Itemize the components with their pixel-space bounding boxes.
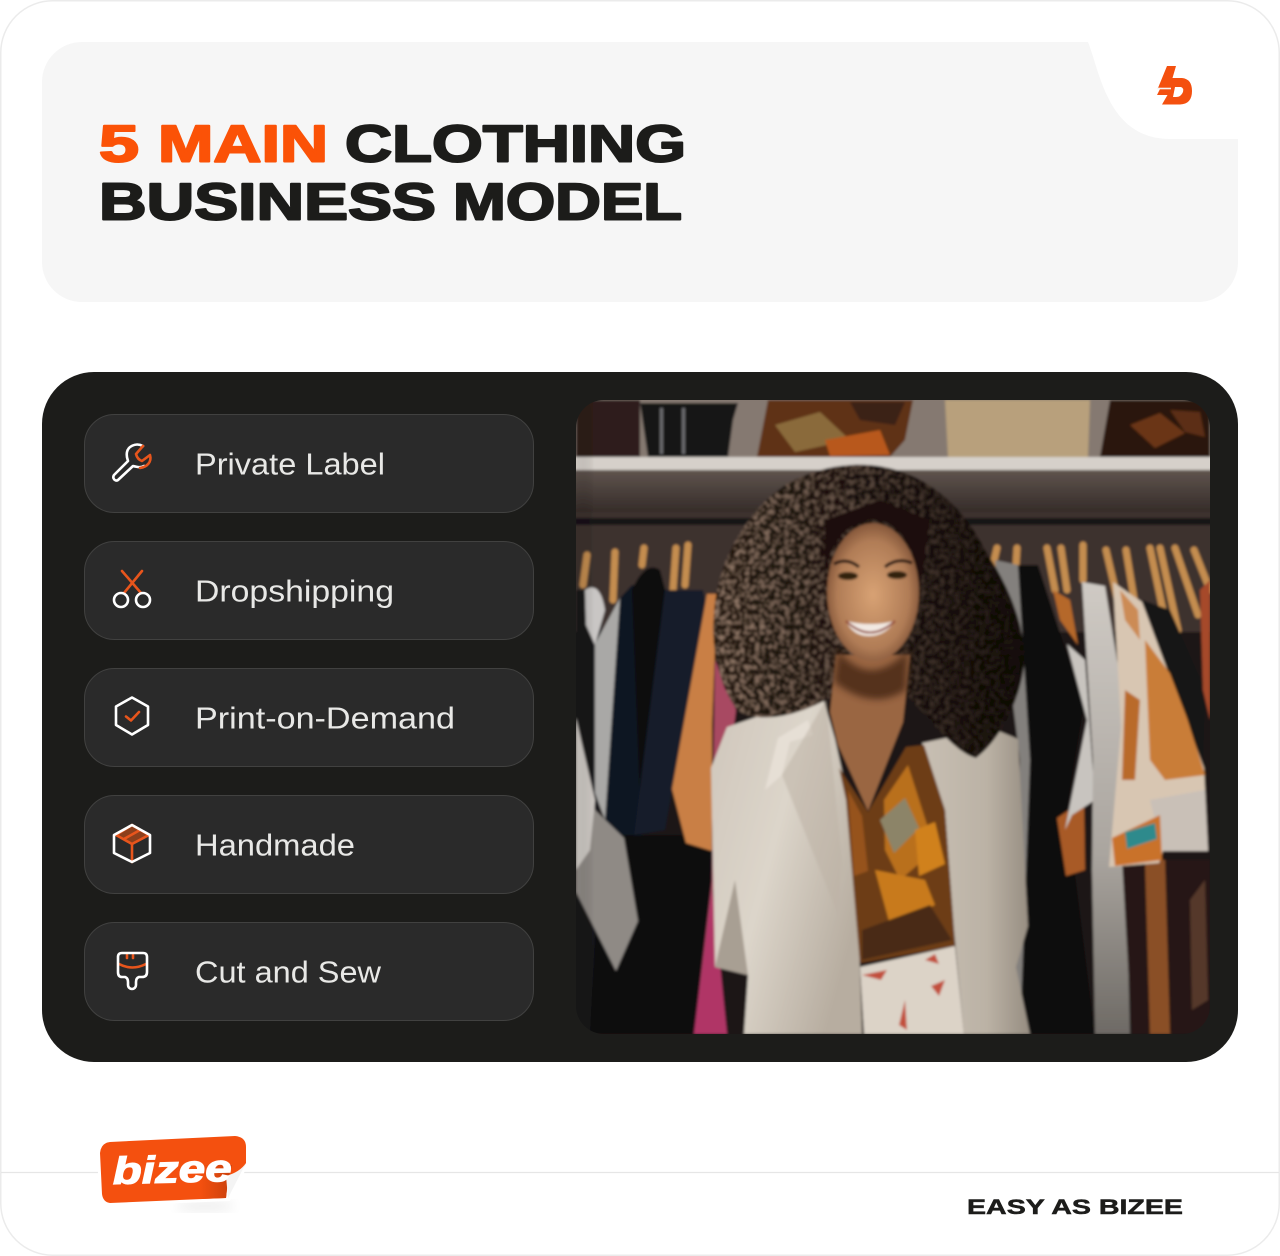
label: Handmade — [195, 828, 355, 862]
garments right — [992, 559, 1032, 993]
rail — [570, 518, 1220, 525]
photo: woman smiling in front of clothing rack — [570, 395, 1220, 1040]
title: 5 — [99, 116, 139, 174]
footer rule — [1, 1172, 1279, 1174]
title: MAIN — [158, 116, 328, 174]
icon: wrench — [113, 445, 150, 481]
face — [827, 523, 919, 661]
icon: scissors — [114, 571, 150, 607]
list item: Private Label — [84, 414, 534, 512]
garments left — [576, 590, 602, 1034]
trousers — [860, 946, 964, 1034]
label: Private Label — [195, 446, 385, 482]
label: Print-on-Demand — [195, 700, 455, 736]
list item: Print-on-Demand — [84, 668, 534, 766]
hair — [713, 465, 1024, 758]
coat right — [922, 727, 1030, 1034]
dark panel — [42, 372, 1238, 1062]
title: BUSINESS — [99, 174, 436, 232]
logo wordmark: bizee — [112, 1148, 232, 1193]
logo: bizee sticker — [97, 1133, 249, 1211]
upper wall — [570, 395, 1220, 457]
neck and chest — [830, 655, 910, 811]
title — [99, 116, 686, 232]
list item: Handmade — [84, 796, 534, 894]
list item: Dropshipping — [84, 542, 534, 640]
label: Dropshipping — [195, 574, 394, 608]
icon: shield check — [116, 698, 148, 734]
shelf — [570, 457, 1220, 470]
hangers — [583, 545, 1210, 630]
icon: box — [114, 825, 150, 862]
title: MODEL — [453, 174, 682, 232]
list item: Cut and Sew — [84, 922, 534, 1020]
tagline: EASY AS BIZEE — [967, 1196, 1183, 1219]
vignette — [576, 400, 590, 1034]
header panel — [42, 42, 1238, 302]
label: Cut and Sew — [195, 954, 382, 990]
title: CLOTHING — [345, 116, 686, 174]
eyes and mouth — [834, 561, 912, 567]
icon: brand mark — [1157, 66, 1192, 104]
icon: brush — [118, 953, 147, 989]
coat left — [711, 698, 862, 1034]
blouse — [839, 745, 955, 963]
